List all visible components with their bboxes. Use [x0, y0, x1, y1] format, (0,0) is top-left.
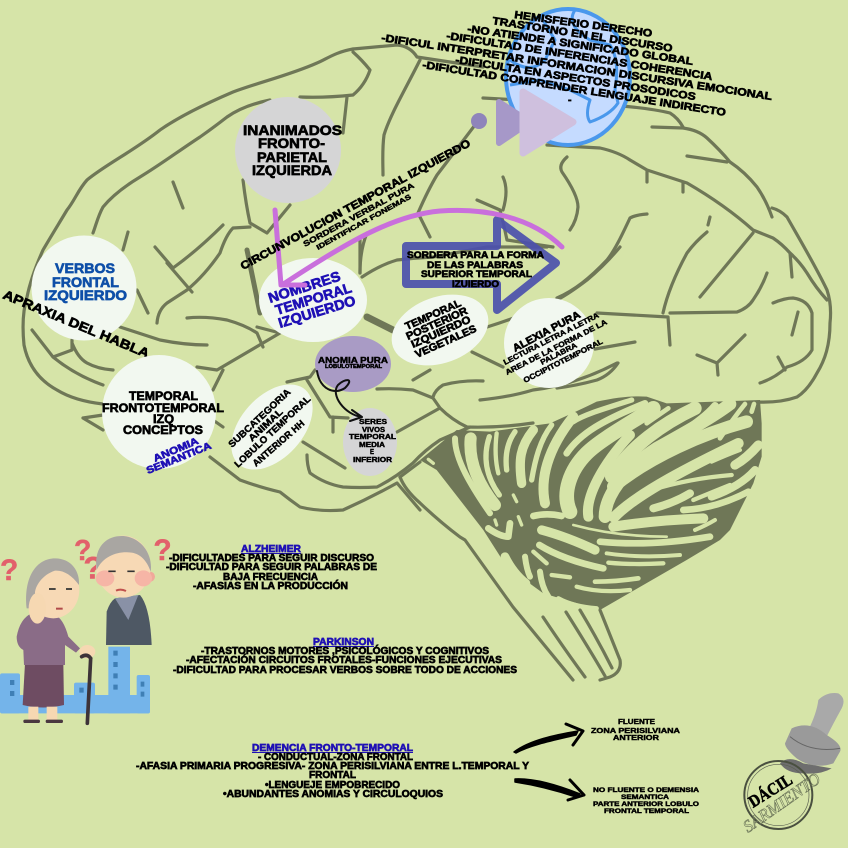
node: temporal frontotemporal: ANOMIA — [152, 436, 200, 465]
cerebellum — [420, 396, 762, 610]
text block: no fluente: FRONTAL TEMPORAL — [604, 808, 689, 815]
node: temporal frontotemporal: FRONTOTEMPORAL — [102, 401, 224, 415]
node: temporal posterior vegetales: POSTERIOR — [404, 305, 470, 343]
node: subcategoria animal — [216, 369, 328, 485]
node: temporal posterior vegetales: TEMPORAL — [403, 297, 464, 333]
node: seres vivos — [343, 408, 397, 476]
icon: question marks: ? — [83, 549, 103, 585]
text block: parkinson: -DIFICULTAD PARA PROCESAR VERBOS SOBRE TODO DE ACCIONES — [173, 665, 517, 676]
node: nombres temporal izquierdo: IZQUIERDO — [276, 292, 357, 331]
text block: sordera para la forma — [407, 250, 544, 290]
text block: alzheimer: -DIFICULTAD PARA SEGUIR PALABRAS DE — [166, 562, 377, 573]
text block: demencia fronto-temporal: DEMENCIA FRONTO-TEMPORAL — [252, 743, 413, 754]
text block: alzheimer — [166, 544, 377, 592]
node: subcategoria animal: ANIMAL — [247, 407, 286, 444]
node: seres vivos: INFERIOR — [353, 457, 392, 464]
illustration: elderly couple with city — [0, 534, 172, 723]
node: nombres temporal izquierdo — [259, 258, 367, 342]
arrow: sordera outline arrow — [406, 220, 556, 310]
text block: alzheimer: BAJA FRECUENCIA — [223, 572, 318, 583]
icon: stamp logo: DÁCIL — [745, 770, 796, 811]
text block: no fluente: SEMANTICA — [621, 794, 669, 801]
node: inanimados: INANIMADOS — [243, 123, 342, 138]
text block: demencia fronto-temporal: -AFASIA PRIMARIA PROGRESIVA- ZONA PERISILVIANA ENTRE L.TEMPORAL Y — [136, 761, 529, 772]
text block: no fluente: PARTE ANTERIOR LOBULO — [593, 801, 699, 808]
text block: fluente: ANTERIOR — [613, 733, 660, 742]
text block: demencia fronto-temporal: - CONDUCTUAL-ZONA FRONTAL — [258, 752, 413, 763]
icon: question marks: ? — [74, 535, 91, 567]
node: anomia pura: ANOMIA PURA — [318, 355, 388, 365]
text block: fluente — [591, 717, 681, 742]
icon: question marks: ? — [153, 534, 172, 567]
node: anomia pura: LOBULOTEMPORAL — [325, 364, 382, 370]
text block: alzheimer: -AFASIAS EN LA PRODUCCIÓN — [193, 579, 348, 592]
node: temporal posterior vegetales — [382, 282, 498, 378]
node: alexia pura: AREA DE LA FORMA DE LA — [504, 317, 609, 377]
text block: parkinson: -AFECTACIÓN CIRCUITOS FROTALES-FUNCIONES EJECUTIVAS — [186, 653, 502, 666]
text block: parkinson — [173, 637, 517, 676]
text block: no fluente — [593, 787, 699, 815]
text block: fluente: FLUENTE — [618, 717, 655, 726]
arrow: pink curved arrow — [275, 210, 562, 285]
text block: hemisferio derecho: -DIFICUL INTERPRETAR INFORMACION DISCURSIVA EMOCIONAL — [381, 32, 774, 103]
node: seres vivos: TEMPORAL — [349, 434, 397, 441]
node: temporal posterior vegetales: IZQUIERDO — [409, 314, 473, 351]
node: inanimados — [235, 97, 342, 203]
node: seres vivos: MEDIA — [359, 442, 385, 449]
node: alexia pura: PALABRA — [539, 340, 579, 367]
node: temporal frontotemporal: SEMANTICA — [145, 441, 213, 477]
arrow: to fluente — [514, 724, 583, 753]
node: temporal frontotemporal: TEMPORAL — [129, 389, 198, 403]
node: inanimados: PARIETAL — [257, 150, 327, 165]
icon: woman — [17, 558, 95, 723]
icon: man — [96, 536, 155, 645]
node: seres vivos: SERES — [359, 419, 387, 426]
text block: no fluente: NO FLUENTE O DEMENSIA — [593, 787, 699, 794]
node: alexia pura: OCCIPITOTEMPORAL — [522, 337, 605, 385]
node: verbos: IZQUIERDO — [44, 288, 127, 303]
text block: hemisferio derecho — [381, 9, 774, 119]
text block: fluente: ZONA PERISILVIANA — [591, 726, 681, 735]
arrow: loop from anomia pura to seres vivos — [317, 371, 362, 421]
node: verbos — [32, 236, 136, 340]
text block: demencia fronto-temporal — [136, 743, 529, 800]
text block: hemisferio derecho: TRASTORNO EN EL DISCURSO — [492, 15, 673, 55]
text block: hemisferio derecho: - — [568, 94, 572, 106]
node: seres vivos: E — [370, 449, 374, 456]
text block: hemisferio derecho: -DIFICULTAD COMPRENDER LENGUAJE INDIRECTO — [422, 59, 727, 119]
node: inanimados: FRONTO- — [258, 136, 325, 151]
text block: circunvolucion temporal: IDENTIFICAR FONEMAS — [316, 194, 413, 252]
text block: sordera para la forma: SUPERIOR TEMPORAL — [421, 269, 532, 280]
node: anomia pura — [315, 336, 391, 392]
text block: hemisferio derecho: HEMISFERIO DERECHO — [514, 9, 653, 40]
node: nombres temporal izquierdo: NOMBRES — [266, 268, 342, 306]
text block: circunvolucion temporal: SORDERA VERBAL PURA — [302, 181, 416, 249]
icon: blue buildings — [0, 647, 150, 713]
icon: stamp logo — [739, 693, 844, 836]
node: alexia pura: ALEXIA PURA — [511, 309, 583, 355]
text block: sordera para la forma: DE LAS PALABRAS — [427, 260, 523, 271]
arrow: to no fluente — [515, 779, 584, 800]
text block: circunvolucion temporal: CIRCUNVOLUCION TEMPORAL IZQUIERDO — [239, 137, 473, 273]
play arrows — [471, 92, 573, 153]
node: alexia pura — [502, 298, 609, 388]
text block: hemisferio derecho: -NO ATIENDE A SIGNIFICADO GLOBAL — [467, 23, 695, 68]
node: verbos: FRONTAL — [52, 275, 119, 290]
text block: alzheimer: -DIFICULTADES PARA SEGUIR DISCURSO — [169, 553, 374, 564]
text block: parkinson: PARKINSON — [313, 637, 374, 648]
icon: question marks — [0, 534, 172, 587]
node: subcategoria animal: LOBULO TEMPORAL — [233, 394, 313, 470]
label: apraxia del habla: APRAXIA DEL HABLA — [1, 287, 152, 361]
text block: sordera para la forma: SORDERA PARA LA FORMA — [407, 250, 544, 261]
node: subcategoria animal: ANTERIOR HH — [251, 418, 307, 469]
node: nombres temporal izquierdo: TEMPORAL — [273, 279, 354, 318]
text block: hemisferio derecho: -DIFICULTA EN ASPECTOS PROSODICOS — [455, 54, 697, 103]
node: temporal frontotemporal: IZQ — [153, 412, 174, 426]
brain outline and sulci — [23, 45, 831, 680]
text block: parkinson: -TRASTORNOS MOTORES ,PSICOLÓGICOS Y COGNITIVOS — [201, 644, 489, 657]
text block: alzheimer: ALZHEIMER — [241, 544, 302, 555]
node: temporal frontotemporal — [102, 355, 224, 477]
text block: hemisferio derecho: -DIFICULTAD DE INFERENCIAS COHERENCIA — [446, 30, 714, 83]
globe icon — [506, 9, 630, 145]
node: verbos: VERBOS — [55, 261, 115, 276]
node: alexia pura: LECTURA LETRA A LETRA — [502, 310, 601, 367]
icon: stamp logo: SARMIENTO — [739, 769, 824, 836]
node: seres vivos: VIVOS — [362, 427, 385, 434]
node: temporal posterior vegetales: VEGETALES — [413, 323, 479, 361]
text block: demencia fronto-temporal: •ABUNDANTES ANOMIAS Y CIRCULOQUIOS — [223, 789, 443, 800]
text block: demencia fronto-temporal: FRONTAL — [309, 770, 356, 781]
text block: demencia fronto-temporal: •LENGUEJE EMPOBRECIDO — [265, 780, 400, 791]
node: inanimados: IZQUIERDA — [252, 163, 332, 178]
text block: sordera para la forma: IZUIERDO — [452, 279, 499, 290]
node: subcategoria animal: SUBCATEGORIA — [227, 387, 293, 450]
node: temporal frontotemporal: CONCEPTOS — [123, 423, 203, 437]
icon: question marks: ? — [0, 554, 18, 587]
